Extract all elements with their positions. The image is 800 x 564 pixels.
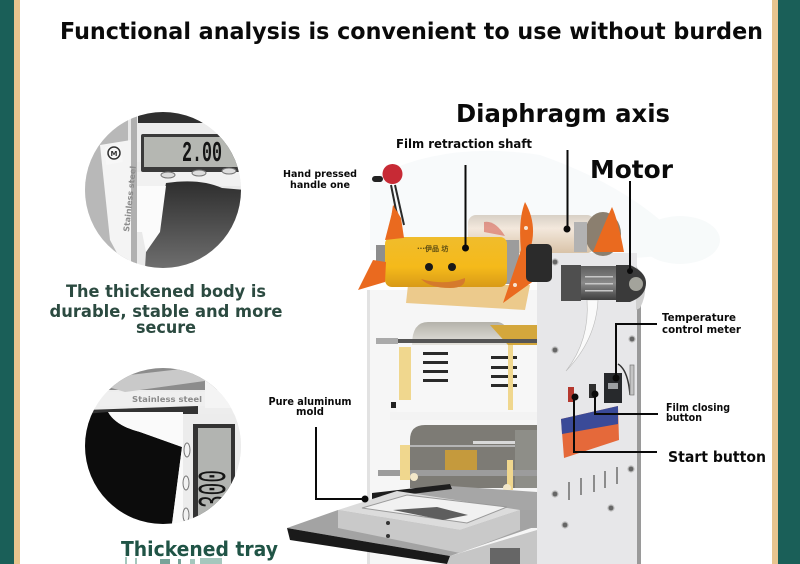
vent slots (568, 467, 618, 500)
right border band (772, 0, 800, 564)
back wheel (585, 212, 621, 256)
switches (568, 387, 574, 402)
left orange fins (385, 205, 403, 240)
photo: caliper reading body thickness: M (111, 150, 118, 158)
warning label (561, 406, 619, 458)
label: film closing button (666, 402, 730, 424)
photo: caliper reading body thickness: 2.00 (182, 137, 222, 170)
title: Functional analysis is convenient to use without burden (60, 19, 763, 45)
film window (412, 322, 510, 345)
cable (566, 300, 598, 371)
label: hand pressed handle: Hand pressed (283, 169, 357, 180)
label: hand pressed handle: handle one (290, 180, 350, 191)
machine side panel (537, 253, 646, 564)
label: film retraction shaft: Film retraction shaft (396, 137, 532, 151)
left border band (0, 0, 20, 564)
label: diaphragm axis: Diaphragm axis (456, 99, 670, 128)
label: film closing button: Film closing (666, 402, 730, 414)
label: motor: Motor (590, 155, 674, 184)
yellow film roll (385, 237, 507, 287)
gear knob (526, 244, 552, 282)
label: hand pressed handle (283, 169, 357, 191)
label: temperature control meter (662, 311, 742, 336)
label: pure aluminum mold (268, 396, 352, 418)
photo: caliper reading body thickness (85, 112, 245, 268)
background wisps (370, 151, 720, 264)
film sheet behind rollers (406, 285, 530, 310)
sealing chamber window (410, 425, 537, 488)
caption: thickened body: durable, stable and more (50, 302, 282, 322)
rollers assembly (358, 164, 624, 303)
photo: caliper reading body thickness: Stainless steel (122, 165, 138, 232)
back diaphragm roll (468, 215, 595, 253)
motor (561, 265, 581, 301)
leader lines (316, 150, 658, 502)
machine front frame (367, 290, 539, 564)
upper cover plate (397, 345, 537, 420)
label: pure aluminum mold: mold (296, 406, 324, 418)
machine (367, 285, 539, 564)
panel screws (552, 259, 635, 528)
caption: thickened body: The thickened body is (66, 282, 266, 302)
photo: caliper reading tray thickness (85, 368, 241, 524)
photo: caliper reading tray thickness: Stainless steel (132, 395, 202, 404)
caption: thickened body: secure (136, 318, 196, 338)
photo: caliper reading tray thickness: 300 (193, 470, 238, 508)
label: pure aluminum mold: Pure aluminum (268, 396, 352, 408)
front orange fin (503, 202, 535, 303)
rollers assembly: ···伊品 坊 (417, 244, 448, 253)
caption: thickened body (50, 282, 282, 338)
label: temperature control meter: control meter (662, 323, 742, 336)
handle (391, 185, 404, 225)
machine tray and aluminum mold (287, 484, 537, 564)
spindle ends (376, 245, 386, 281)
decorative teal foot under caption (125, 557, 222, 564)
back orange fin (593, 207, 624, 252)
duck face (425, 263, 433, 271)
temperature meter (604, 373, 622, 403)
label: film closing button: button (666, 412, 702, 424)
label: temperature control meter: Temperature (662, 311, 736, 324)
caption: thickened tray: Thickened tray (121, 537, 278, 561)
label: start button: Start button (668, 448, 766, 466)
